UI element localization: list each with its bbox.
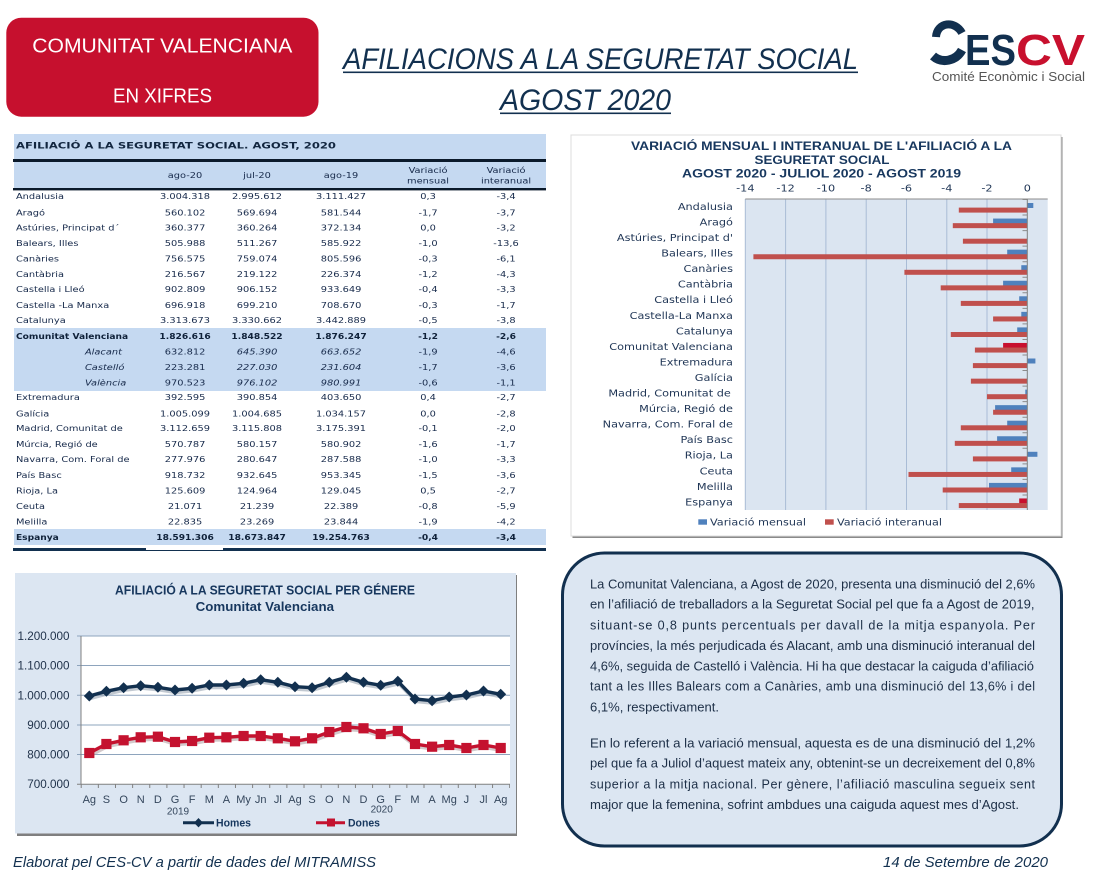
row: Canàries: -6,1: [496, 255, 516, 264]
row: Comunitat Valenciana: 1.876.247: [315, 332, 367, 341]
row: Ceuta: Ceuta: [16, 503, 45, 512]
line chart title: Comunitat Valenciana: [196, 600, 335, 614]
row: Castelló: 223.281: [165, 364, 205, 373]
row: Castella-La Manxa: 708.670: [321, 302, 362, 311]
top axis labels: -12: [776, 183, 795, 194]
row: Alacant: -1,9: [418, 348, 438, 357]
row: Ceuta: 21.071: [168, 503, 202, 512]
row: País Basc: -1,5: [418, 472, 438, 481]
row: Rioja: 129.045: [321, 487, 361, 496]
y axis labels: 1.000.000: [18, 690, 70, 702]
row: Astúries: 0,0: [420, 224, 436, 233]
row: Comunitat Valenciana: -2,6: [496, 332, 516, 341]
bar chart legend: [698, 516, 942, 528]
row: Galícia: -2,8: [496, 410, 516, 419]
row: Balears: -1,0: [418, 240, 438, 249]
row: València: [85, 378, 516, 388]
line chart title: AFILIACIÓ A LA SEGURETAT SOCIAL PER GÉNERE: [115, 582, 415, 598]
row: Galícia: 1.004.685: [232, 410, 282, 419]
logo: CES-CV: ES: [965, 26, 1016, 75]
row: Castella-La Manxa: Castella -La Manxa: [16, 302, 109, 311]
logo: CES-CV: CV: [1016, 26, 1086, 75]
title: [341, 43, 858, 117]
x axis labels: G: [376, 794, 385, 806]
table rows: [16, 166, 531, 542]
category labels: Navarra, Com. Foral de: [603, 419, 733, 430]
row: Cantàbria: -4,3: [496, 271, 516, 280]
row: Ceuta: -0,8: [418, 503, 438, 512]
row: Astúries: 360.264: [237, 224, 278, 233]
category labels: Comunitat Valenciana: [609, 342, 733, 353]
row: Catalunya: 3.313.673: [160, 317, 210, 326]
paragraph 1: 4,6%, seguida de Castelló i València. Hi ha que destacar la caiguda d’afiliació: [590, 660, 1034, 674]
row: Cantàbria: Cantàbria: [16, 271, 64, 280]
row: Aragó: 569.694: [237, 209, 278, 218]
category labels: Andalusia: [678, 202, 733, 213]
row: Aragó: 581.544: [321, 209, 362, 218]
row: Castella-La Manxa: -0,3: [418, 302, 438, 311]
row: Múrcia: 580.902: [321, 441, 361, 450]
row: Espanya: 18.673.847: [228, 533, 286, 542]
x axis labels: O: [325, 794, 334, 806]
row: Madrid: [16, 425, 516, 434]
bar chart title: SEGURETAT SOCIAL: [754, 155, 890, 167]
row: Castella i Lleó: -0,4: [418, 286, 438, 295]
row: Castelló: [85, 363, 516, 373]
top axis labels: [736, 183, 1031, 194]
bar chart title: [631, 140, 1012, 180]
y axis labels: 1.100.000: [18, 660, 70, 672]
row: Múrcia: 580.157: [237, 441, 277, 450]
row: Extremadura: 403.650: [321, 394, 362, 403]
row: Madrid: 3.115.808: [232, 425, 282, 434]
row: Navarra: 277.976: [165, 456, 206, 465]
row: Cantàbria: [16, 271, 516, 280]
row: Catalunya: [16, 317, 516, 326]
paragraph 1: 6,1%, respectivament.: [590, 700, 719, 714]
row: València: 976.102: [237, 379, 278, 388]
x axis labels: 2020: [371, 804, 393, 816]
row: Castella-La Manxa: 696.918: [165, 302, 206, 311]
top axis labels: -10: [817, 183, 835, 194]
row: Andalusia: 3.111.427: [316, 193, 366, 202]
row: Aragó: -3,7: [496, 209, 516, 218]
x axis labels: G: [171, 794, 179, 806]
row: Catalunya: Catalunya: [16, 317, 66, 326]
footer: date: 14 de Setembre de 2020: [883, 855, 1048, 871]
category labels: Canàries: [684, 264, 733, 275]
row: Madrid: 3.112.659: [160, 425, 210, 434]
row: Alacant: -4,6: [496, 348, 516, 357]
row: Castella-La Manxa: 699.210: [237, 302, 278, 311]
y axis labels: 700.000: [27, 778, 70, 791]
row: València: -1,1: [496, 379, 516, 388]
row: Aragó: Aragó: [16, 208, 46, 218]
column headers: interanual: [481, 177, 531, 186]
row: Cantàbria: 216.567: [165, 271, 205, 280]
line: dones: [89, 727, 502, 756]
x axis labels: F: [189, 794, 196, 806]
x axis labels: Jl: [480, 794, 487, 806]
category labels: Múrcia, Regió de: [639, 404, 733, 415]
panel: data table: [13, 134, 546, 551]
row: Balears: 511.267: [237, 240, 277, 249]
row: Madrid: -2,0: [496, 425, 516, 434]
line: homes: [89, 677, 502, 703]
column headers: ago-19: [324, 172, 359, 181]
row: Espanya: 19.254.763: [312, 533, 370, 542]
row: Rioja: 124.964: [237, 487, 278, 496]
row: Castella i Lleó: 902.809: [165, 286, 206, 295]
row: Balears: [16, 240, 519, 249]
row: Canàries: 756.575: [165, 255, 205, 264]
row: Extremadura: 0,4: [420, 394, 436, 403]
row: Múrcia: -1,7: [496, 441, 516, 450]
column headers: [168, 166, 531, 186]
row: Melilla: [16, 518, 516, 527]
row: Navarra: -1,0: [418, 456, 438, 465]
category labels: Astúries, Principat d': [617, 233, 733, 244]
x axis labels: 2019: [167, 806, 190, 818]
row: Alacant: 632.812: [165, 348, 205, 357]
row: Melilla: 23.844: [324, 518, 359, 527]
row: Navarra: Navarra, Com. Foral de: [16, 456, 130, 465]
row: Madrid: 3.175.391: [316, 425, 366, 434]
row: Melilla: 22.835: [168, 518, 202, 527]
row: Navarra: [16, 456, 516, 465]
row: País Basc: País Basc: [16, 472, 62, 481]
row: País Basc: 918.732: [165, 472, 205, 481]
row: València: 980.991: [321, 379, 361, 388]
row: Cantàbria: -1,2: [418, 271, 438, 280]
row: Castella i Lleó: -3,3: [496, 286, 516, 295]
top axis labels: 0: [1024, 183, 1031, 194]
paragraph 2: superior a la mitja nacional. Per gènere, l’afiliació masculina segueix sent: [590, 778, 1036, 792]
row: Castella i Lleó: 906.152: [237, 286, 277, 295]
row: Canàries: 759.074: [237, 255, 278, 264]
row: Aragó: -1,7: [418, 209, 438, 218]
bar chart title: AGOST 2020 - JULIOL 2020 - AGOST 2019: [682, 168, 961, 180]
category labels: Balears, Illes: [661, 248, 733, 259]
category labels: Cantàbria: [678, 280, 733, 290]
x axis labels: My: [236, 794, 251, 806]
row: Melilla: Melilla: [16, 518, 47, 527]
top axis labels: -2: [981, 183, 993, 194]
row: Comunitat Valenciana: -1,2: [418, 332, 438, 341]
bar chart legend: Variació interanual: [837, 516, 942, 528]
row: Extremadura: 390.854: [237, 394, 278, 403]
category labels: Aragó: [700, 217, 733, 228]
category labels: País Basc: [680, 435, 733, 446]
bar chart legend: Variació mensual: [710, 516, 806, 528]
paragraph 1: [590, 578, 1035, 714]
row: Alacant: [84, 348, 516, 357]
row: Astúries: -3,2: [496, 224, 516, 233]
row: Galícia: [16, 410, 516, 419]
x axis labels: Jl: [274, 794, 282, 806]
column headers: Variació: [487, 166, 526, 176]
panel: commentary text box: [562, 553, 1062, 846]
category labels: Catalunya: [676, 326, 733, 337]
x axis labels: O: [119, 794, 128, 806]
row: Catalunya: 3.442.889: [316, 317, 366, 326]
table heading: AFILIACIÓ A LA SEGURETAT SOCIAL. AGOST, 2020: [16, 140, 336, 152]
paragraph 1: tant a les Illes Balears com a Canàries, amb una disminució del 13,6% i del: [590, 680, 1035, 694]
row: Galícia: Galícia: [16, 410, 49, 419]
row: Madrid: Madrid, Comunitat de: [16, 425, 123, 434]
paragraph 1: La Comunitat Valenciana, a Agost de 2020, presenta una disminució del 2,6%: [590, 578, 1035, 592]
row: Aragó: [16, 208, 516, 218]
top axis labels: -8: [861, 183, 872, 194]
row: Múrcia: -1,6: [418, 441, 438, 450]
row: Cantàbria: 226.374: [321, 271, 362, 280]
row: Ceuta: -5,9: [496, 503, 516, 512]
line chart legend: Homes: [216, 818, 251, 830]
category labels: Ceuta: [700, 466, 733, 477]
row: Madrid: -0,1: [418, 425, 438, 434]
row: Galícia: 1.034.157: [316, 410, 366, 419]
row: Espanya: [16, 533, 516, 542]
paragraph 2: [590, 736, 1036, 812]
line chart legend: Dones: [348, 818, 380, 830]
row: Múrcia: [16, 440, 516, 450]
row: Múrcia: 570.787: [165, 441, 205, 450]
category labels: Madrid, Comunitat de: [608, 388, 731, 399]
logo: CES-CV: Comité Econòmic i Social: [932, 69, 1085, 84]
row: Balears: -13,6: [493, 240, 519, 249]
x axis labels: D: [360, 794, 368, 806]
row: Comunitat Valenciana: 1.848.522: [231, 332, 283, 341]
x axis labels: N: [137, 794, 145, 806]
row: Canàries: Canàries: [16, 255, 59, 264]
row: València: València: [85, 378, 126, 388]
category labels: Castella i Lleó: [654, 295, 733, 306]
row: Galícia: 0,0: [420, 410, 436, 419]
row: Andalusia: Andalusia: [16, 193, 64, 202]
row: Andalusia: -3,4: [496, 193, 516, 202]
row: Comunitat Valenciana: [16, 332, 516, 341]
row: Castella-La Manxa: -1,7: [496, 302, 516, 311]
row: País Basc: -3,6: [496, 472, 516, 481]
row: País Basc: [16, 472, 516, 481]
row: Extremadura: 392.595: [165, 394, 205, 403]
row: Rioja: 125.609: [165, 487, 206, 496]
x axis labels: F: [394, 794, 401, 806]
row: Galícia: 1.005.099: [160, 410, 210, 419]
row: Rioja: 0,5: [420, 487, 436, 496]
x axis labels: [83, 794, 507, 818]
top axis labels: -6: [901, 183, 912, 194]
row: Espanya: Espanya: [16, 533, 59, 542]
badge: Comunitat Valenciana en xifres: COMUNITAT VALENCIANA: [32, 34, 293, 58]
badge: Comunitat Valenciana en xifres: [6, 18, 319, 117]
bars: variació mensual: [989, 203, 1037, 503]
category labels: Espanya: [685, 497, 733, 508]
column headers: Variació: [409, 166, 448, 176]
category labels: [603, 202, 733, 508]
row: Alacant: Alacant: [84, 348, 122, 357]
row: Comunitat Valenciana: Comunitat Valenciana: [16, 332, 128, 341]
row: Ceuta: [16, 503, 516, 512]
x axis labels: D: [154, 794, 162, 806]
logo: CES-CV: [932, 24, 1086, 84]
row: Extremadura: Extremadura: [16, 394, 80, 403]
panel: line chart by gender: [15, 573, 517, 836]
row: Balears: 505.988: [165, 240, 206, 249]
paragraph 1: situant-se 0,8 punts percentuals per davall de la mitja espanyola. Per: [590, 618, 1035, 632]
paragraph 2: major que la femenina, sofrint ambdues una caiguda aquest mes d’Agost.: [590, 798, 1019, 812]
row: Alacant: 645.390: [237, 348, 278, 357]
row: Andalusia: [16, 193, 516, 202]
x axis labels: Jn: [255, 794, 267, 806]
title: AGOST 2020: [498, 84, 671, 117]
row: Castella i Lleó: Castella i Lleó: [16, 285, 85, 295]
row: Melilla: -4,2: [496, 518, 516, 527]
x axis labels: J: [464, 794, 469, 806]
x axis labels: S: [308, 794, 316, 806]
y axis labels: [18, 630, 70, 791]
category labels: Rioja, La: [685, 451, 733, 461]
x axis labels: S: [103, 794, 110, 806]
top axis labels: -14: [736, 183, 755, 194]
x axis labels: Ag: [288, 794, 302, 806]
row: Canàries: [16, 255, 516, 264]
column headers: ago-20: [168, 172, 203, 181]
row: Navarra: 280.647: [237, 456, 277, 465]
category labels: Melilla: [697, 482, 733, 493]
category labels: Castella-La Manxa: [630, 311, 733, 322]
row: Canàries: -0,3: [418, 255, 438, 264]
row: Navarra: 287.588: [321, 456, 362, 465]
x axis labels: Ag: [83, 794, 96, 806]
row: Comunitat Valenciana: 1.826.616: [159, 332, 211, 341]
row: Rioja: -2,7: [496, 487, 516, 496]
paragraph 2: pel que fa a Juliol d’aquest mateix any, obtenint-se un decreixement del 0,8%: [590, 756, 1035, 770]
row: Aragó: 560.102: [165, 209, 205, 218]
footer: source: Elaborat pel CES-CV a partir de dades del MITRAMISS: [13, 855, 376, 871]
row: Balears: 585.922: [321, 240, 361, 249]
column headers: jul-20: [242, 172, 271, 181]
row: Castelló: -3,6: [496, 364, 516, 373]
row: Navarra: -3,3: [496, 456, 516, 465]
row: Andalusia: 0,3: [420, 193, 436, 202]
row: Castella i Lleó: [16, 285, 516, 295]
row: Castelló: Castelló: [85, 363, 125, 373]
y axis labels: 1.200.000: [18, 630, 70, 643]
badge: Comunitat Valenciana en xifres: EN XIFRES: [113, 84, 212, 108]
row: Ceuta: 21.239: [240, 503, 275, 512]
bars: variació interanual: [753, 208, 1027, 508]
row: Andalusia: 3.004.318: [160, 193, 210, 202]
row: Extremadura: -2,7: [496, 394, 516, 403]
row: Castella-La Manxa: [16, 302, 516, 311]
row: Rioja: Rioja, La: [16, 487, 58, 496]
row: Extremadura: [16, 394, 516, 403]
row: País Basc: 953.345: [321, 472, 361, 481]
x axis labels: M: [205, 794, 214, 806]
y axis labels: 900.000: [27, 719, 70, 732]
row: Castella i Lleó: 933.649: [321, 286, 362, 295]
paragraph 2: En lo referent a la variació mensual, aquesta es de una disminució del 1,2%: [590, 736, 1035, 750]
row: Melilla: 23.269: [240, 518, 275, 527]
column headers: mensual: [407, 177, 449, 186]
category labels: Galícia: [695, 373, 733, 384]
row: Rioja: [16, 487, 516, 496]
x axis labels: M: [410, 794, 420, 806]
panel: bar chart variation: [571, 135, 1062, 538]
row: Espanya: -0,4: [418, 533, 438, 542]
row: Astúries: 360.377: [165, 224, 205, 233]
row: Astúries: Astúries, Principat d´: [16, 223, 119, 233]
row: Canàries: 805.596: [321, 255, 362, 264]
title: AFILIACIONS A LA SEGURETAT SOCIAL: [341, 43, 858, 76]
x axis labels: A: [223, 794, 231, 806]
row: Catalunya: -3,8: [496, 317, 516, 326]
row: Espanya: 18.591.306: [156, 533, 214, 542]
top axis labels: -4: [941, 183, 953, 194]
x axis labels: Ag: [494, 794, 507, 806]
row: Alacant: 663.652: [321, 348, 362, 357]
x axis labels: N: [342, 794, 350, 806]
row: Balears: Balears, Illes: [16, 240, 79, 249]
line chart legend: [183, 818, 380, 830]
paragraph 1: províncies, la més perjudicada és Alacant, amb una disminució interanual del: [590, 639, 1035, 653]
x axis labels: A: [428, 794, 436, 806]
row: Espanya: -3,4: [496, 533, 516, 542]
bar chart title: VARIACIÓ MENSUAL I INTERANUAL DE L'AFILIACIÓ A LA: [631, 140, 1012, 153]
row: Castelló: -1,7: [418, 364, 438, 373]
x axis labels: Mg: [442, 794, 457, 806]
line chart title: [115, 582, 415, 614]
row: Múrcia: Múrcia, Regió de: [16, 440, 98, 450]
row: Catalunya: -0,5: [418, 317, 438, 326]
row: Andalusia: 2.995.612: [232, 193, 282, 202]
row: Cantàbria: 219.122: [237, 271, 277, 280]
category labels: Extremadura: [660, 357, 733, 368]
row: Astúries: 372.134: [321, 224, 362, 233]
row: València: 970.523: [165, 379, 206, 388]
row: Ceuta: 22.389: [324, 503, 359, 512]
y axis labels: 800.000: [27, 748, 70, 762]
row: Catalunya: 3.330.662: [232, 317, 282, 326]
row: Castelló: 227.030: [237, 364, 278, 373]
paragraph 1: en l’afiliació de treballadors a la Seguretat Social pel que fa a Agost de 2019,: [590, 598, 1034, 612]
row: País Basc: 932.645: [237, 472, 277, 481]
row: Melilla: -1,9: [418, 518, 438, 527]
row: València: -0,6: [418, 379, 438, 388]
row: Castelló: 231.604: [321, 364, 362, 373]
row: Astúries: [16, 223, 516, 233]
